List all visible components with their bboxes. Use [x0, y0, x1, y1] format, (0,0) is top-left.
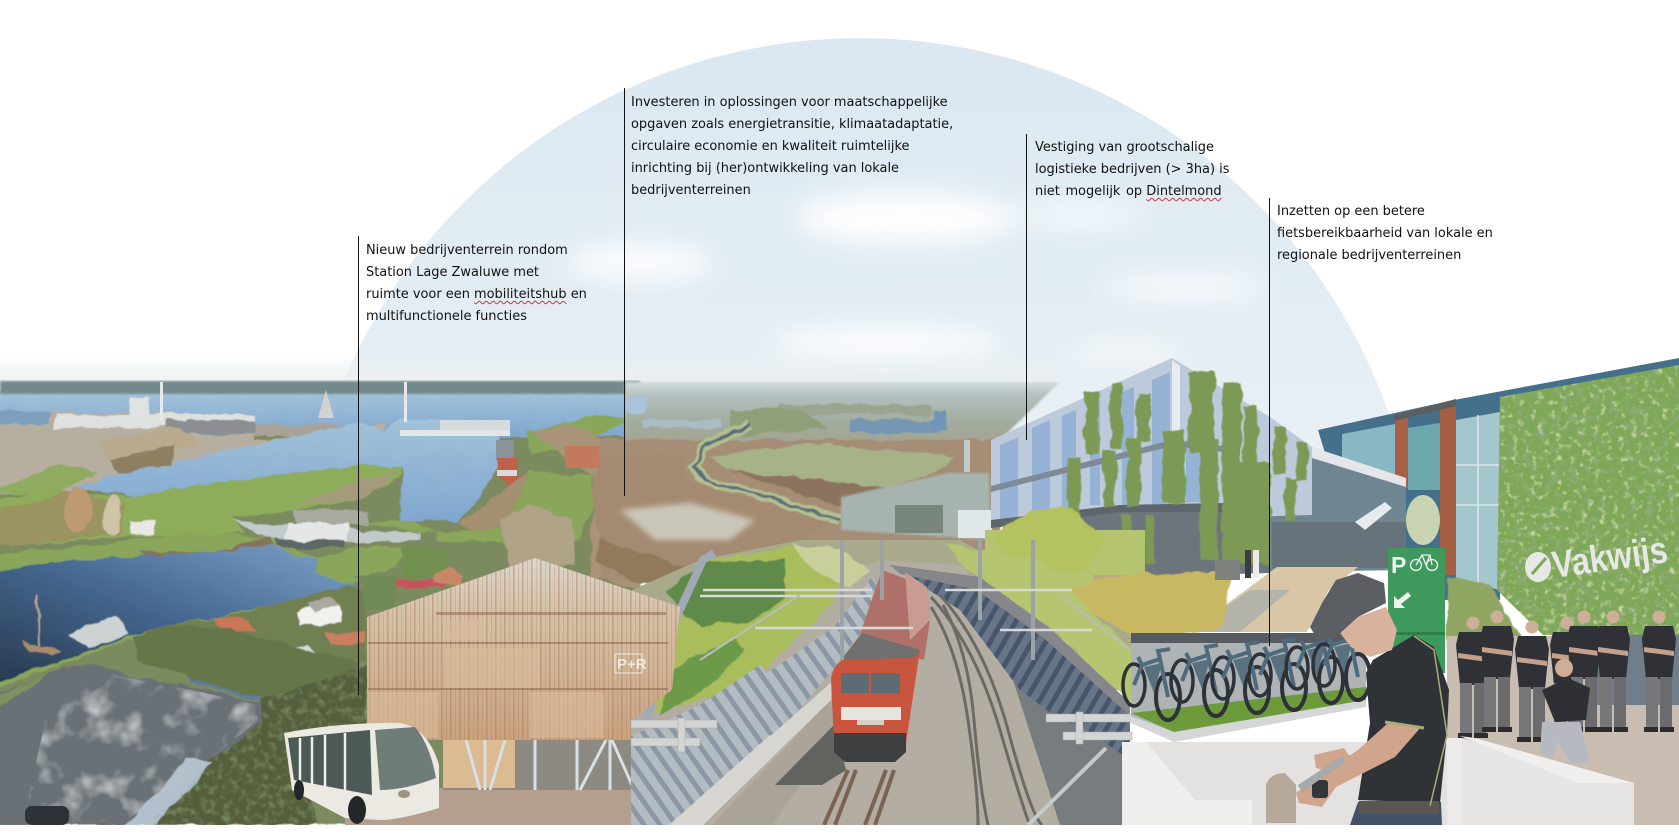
- living green wall: [1497, 365, 1679, 635]
- grass banks: [318, 417, 640, 577]
- dark trees: [147, 665, 367, 825]
- moored boats: [21, 595, 130, 656]
- autumn trees: [0, 486, 125, 548]
- wooden park and ride building: [345, 558, 680, 825]
- right embankment greenery: [945, 545, 1140, 710]
- gravel bed: [631, 560, 1130, 825]
- flooded white patch: [620, 503, 755, 540]
- distant town blocks: [625, 398, 946, 435]
- land base: [0, 396, 640, 825]
- horizon haze: [0, 352, 1060, 384]
- callout: new business park around station: [366, 243, 587, 324]
- car park and planting texture: [22, 665, 367, 825]
- electric shuttle bus: [284, 723, 439, 824]
- field base: [600, 440, 1000, 580]
- cap: [1310, 573, 1386, 640]
- callout: no large-scale logistics: logistieke bedrijven (> 3ha) is: [1035, 162, 1229, 177]
- shrubs: [1447, 577, 1520, 650]
- callout: better cycling access: [1277, 204, 1493, 263]
- river: [69, 417, 500, 523]
- forearm: [1296, 723, 1421, 807]
- e-bike rack on grass platform: [1123, 629, 1370, 742]
- bicycles: [1123, 629, 1370, 720]
- floor bands: [991, 440, 1240, 492]
- pale roof strip: [127, 758, 214, 825]
- facade: [367, 558, 680, 740]
- callout: investing in societal challenges: [631, 95, 953, 198]
- harbour details: turbines, ships and brick house: [160, 382, 604, 485]
- callout: better cycling access: regionale bedrijventerreinen: [1277, 248, 1461, 263]
- Vakwijs main building: [1318, 358, 1679, 600]
- right noise barrier: [890, 565, 1130, 760]
- callout: investing in societal challenges: Investeren in oplossingen voor maatschappelijke: [631, 95, 948, 110]
- upper facade: [991, 358, 1312, 525]
- sky dome with clouds: [317, 38, 1403, 460]
- torso: [1358, 635, 1449, 803]
- sleeve hem: [1385, 722, 1424, 728]
- waterfront houses and gardens: [166, 566, 463, 662]
- group of staff: [1456, 610, 1676, 764]
- red locomotive and wagons: [831, 570, 930, 762]
- wrench: [1298, 756, 1346, 792]
- climbing plants: [1067, 372, 1307, 565]
- white concrete tank: [1122, 736, 1634, 825]
- rail tracks: [931, 595, 1042, 825]
- distant shore: [0, 381, 640, 394]
- callout: new business park around station: ruimte voor een mobiliteitshub en: [366, 287, 587, 302]
- greenhouse: [841, 440, 992, 540]
- gravel forecourt: [345, 788, 633, 825]
- arch post: [645, 553, 714, 727]
- right photo: green office building: [985, 358, 1679, 825]
- left noise barrier: [631, 577, 885, 825]
- left arch and gantry foreground: [631, 665, 1132, 825]
- leader line: cycling access: [1269, 198, 1270, 646]
- left embankment grass: [655, 545, 870, 715]
- stilts: [466, 740, 632, 790]
- train photo: rail line with noise barriers: [631, 540, 1140, 825]
- reed and tan shore: [400, 425, 640, 590]
- sluice wall: [140, 537, 272, 560]
- catenary poles and wires: [700, 540, 1130, 660]
- industrial quay: [0, 398, 385, 497]
- polder road: [693, 423, 841, 520]
- leader line: societal challenges: [624, 88, 625, 496]
- head: [1340, 607, 1397, 657]
- bicycle parking sign: P: [1391, 552, 1406, 578]
- callout: investing in societal challenges: bedrijventerreinen: [631, 183, 751, 198]
- callout: no large-scale logistics: Vestiging van grootschalige: [1035, 140, 1214, 155]
- callout: investing in societal challenges: circulaire economie en kwaliteit ruimtelijke: [631, 139, 909, 154]
- paved path: [1189, 567, 1358, 632]
- estuary water: [0, 391, 640, 437]
- right track bed: [1000, 640, 1130, 825]
- planting base under tree: [985, 530, 1145, 630]
- lower bank: [0, 532, 360, 690]
- window panes: [1000, 372, 1204, 520]
- lower basin: [0, 547, 355, 684]
- callout: better cycling access: fietsbereikbaarheid van lokale en: [1277, 226, 1493, 241]
- callout: new business park around station: Station Lage Zwaluwe met: [366, 265, 539, 280]
- middle photo: polder with road and fields: [590, 398, 1000, 585]
- low glazed wing: [1270, 447, 1440, 572]
- leader line: logistics: [1026, 134, 1027, 440]
- platform path: [712, 700, 834, 825]
- callout: investing in societal challenges: opgaven zoals energietransitie, klimaatadaptatie,: [631, 117, 953, 132]
- callout: new business park around station: multifunctionele functies: [366, 309, 527, 324]
- callout: new business park around station: Nieuw bedrijventerrein rondom: [366, 243, 568, 258]
- ground floor: [1003, 512, 1270, 580]
- brown field: [590, 466, 600, 530]
- yellow planting: [1048, 573, 1233, 655]
- crouching man: [1540, 659, 1590, 764]
- embankment base: [632, 540, 1140, 690]
- callout: better cycling access: Inzetten op een betere: [1277, 204, 1425, 219]
- yellow-green tree: [996, 507, 1106, 572]
- bicycle parking sign: [1388, 548, 1445, 673]
- leader line: new business park: [358, 236, 359, 695]
- jeans and belt: [1350, 802, 1442, 825]
- callout: no large-scale logistics: niet mogelijk op Dintelmond: [1035, 184, 1222, 199]
- undercroft: [443, 738, 633, 790]
- watch: [1312, 780, 1328, 798]
- hedge: [135, 627, 367, 700]
- upper hand: [1314, 748, 1352, 772]
- asphalt car park: [0, 663, 261, 825]
- back wall: [1595, 635, 1679, 705]
- lock complex: [130, 510, 420, 548]
- left photo: harbour and water landscape: [0, 391, 640, 825]
- paving: [1447, 636, 1679, 825]
- P+R sign: P+R: [617, 656, 647, 673]
- callout: no large-scale logistics: [1035, 140, 1229, 202]
- green peninsula: [0, 465, 402, 547]
- distant town haze: [623, 381, 1059, 442]
- green field: [710, 442, 954, 488]
- callout: investing in societal challenges: inrichting bij (her)ontwikkeling van lokale: [631, 161, 899, 176]
- technician at work: [1296, 573, 1449, 825]
